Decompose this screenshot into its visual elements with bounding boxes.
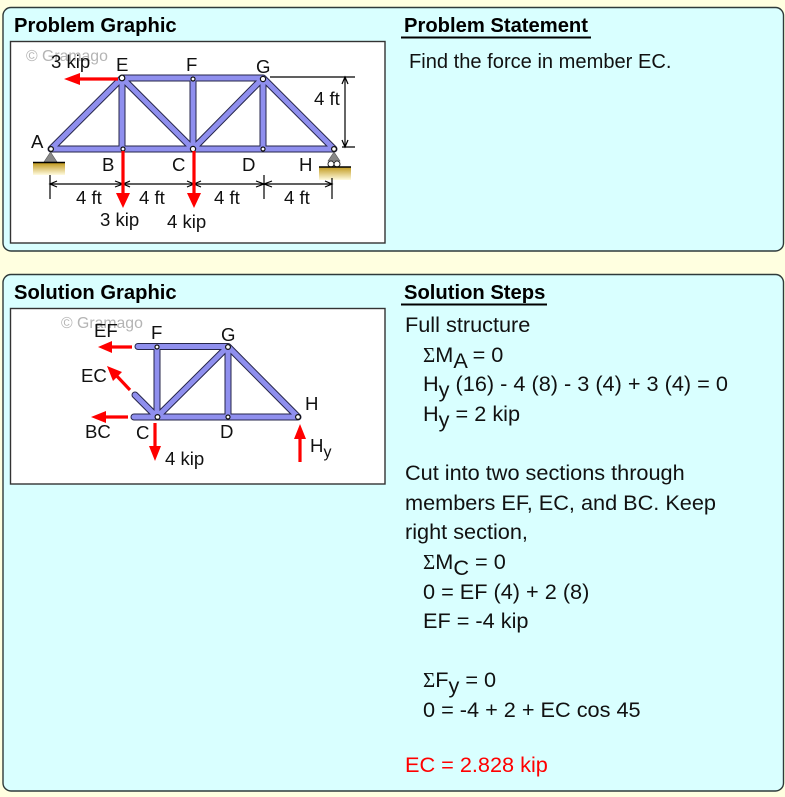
- text: solution steps: H: [423, 401, 439, 426]
- labels: problem graphic: 4 ft: [314, 88, 341, 109]
- labels: problem graphic: H: [299, 154, 312, 175]
- text: solution steps: ΣF: [423, 667, 448, 692]
- text: solution steps: ΣM: [423, 342, 453, 367]
- support: roller at H: [319, 152, 351, 180]
- heading: solution graphic: Solution Graphic: [14, 282, 177, 304]
- labels: solution graphic: y: [323, 444, 331, 461]
- heading: problem statement: Problem Statement: [404, 15, 588, 37]
- arrow: EC: [107, 366, 130, 390]
- text: solution steps: ΣM: [423, 549, 453, 574]
- text: answer: EC = 2.828 kip: [405, 752, 548, 777]
- labels: problem graphic: B: [102, 154, 114, 175]
- labels: solution graphic: H: [305, 393, 318, 414]
- labels: solution graphic: D: [220, 421, 233, 442]
- text: solution steps: (16) - 4 (8) - 3 (4) + 3 (4) = 0: [450, 371, 728, 396]
- text: solution steps: EF = -4 kip: [423, 608, 528, 633]
- text: solution steps: y: [439, 407, 450, 432]
- text: solution steps: Full structure: [405, 312, 530, 337]
- arrow: 3 kip down at B: [116, 151, 130, 208]
- panel: solution graphic box: [10, 308, 385, 484]
- arrow: 3 kip left at E: [64, 73, 118, 85]
- text: solution steps: [405, 312, 728, 777]
- labels: solution graphic: 4 kip: [165, 448, 204, 469]
- arrow: BC: [91, 411, 128, 423]
- text: solution steps: H: [423, 371, 439, 396]
- truss: right section: [134, 345, 300, 419]
- text: solution steps: 0 = -4 + 2 + EC cos 45: [423, 697, 641, 722]
- labels: solution graphic: F: [151, 322, 162, 343]
- labels: problem graphic: 4 ft: [139, 187, 166, 208]
- panel: problem graphic box: [10, 42, 385, 243]
- labels: problem graphic: F: [186, 54, 197, 75]
- panel: solution: [3, 274, 784, 791]
- panel: problem: [3, 8, 784, 251]
- text: solution steps: C: [453, 555, 469, 580]
- text: solution steps: = 2 kip: [450, 401, 520, 426]
- labels: problem graphic: A: [31, 131, 44, 152]
- labels: problem graphic: 4 ft: [284, 187, 311, 208]
- text: problem statement: Find the force in member EC.: [409, 51, 671, 73]
- text: solution steps: = 0: [469, 549, 506, 574]
- support: pin at A: [33, 152, 65, 175]
- dimensions: horizontal spans: [50, 175, 332, 199]
- watermark: © Gramago: [26, 48, 108, 65]
- labels: problem graphic: 3 kip: [51, 51, 90, 72]
- labels: solution graphic: EC: [81, 365, 107, 386]
- labels: problem graphic: 4 ft: [76, 187, 103, 208]
- labels: problem graphic: 4 kip: [167, 211, 206, 232]
- text: solution steps: A: [453, 348, 468, 373]
- arrow: EF: [98, 341, 132, 353]
- labels: solution graphic: G: [221, 324, 235, 345]
- arrow: 4 kip down at C: [149, 423, 161, 461]
- truss: full structure: [49, 75, 336, 152]
- labels: solution graphic: H: [310, 435, 323, 456]
- text: solution steps: right section,: [405, 519, 528, 544]
- text: solution steps: = 0: [459, 667, 496, 692]
- heading: solution steps: Solution Steps: [404, 282, 545, 304]
- labels: solution graphic: BC: [85, 421, 111, 442]
- labels: solution graphic: EF: [94, 320, 118, 341]
- labels: problem graphic: [31, 51, 341, 232]
- text: solution steps: members EF, EC, and BC. Keep: [405, 490, 716, 515]
- labels: problem graphic: C: [172, 154, 185, 175]
- text: solution steps: = 0: [467, 342, 503, 367]
- arrow: 4 kip down at C: [187, 151, 201, 208]
- dimension: vertical height: [270, 77, 355, 147]
- text: solution steps: Cut into two sections through: [405, 460, 685, 485]
- text: solution steps: 0 = EF (4) + 2 (8): [423, 579, 589, 604]
- labels: problem graphic: E: [116, 54, 128, 75]
- text: solution steps: y: [448, 673, 459, 698]
- labels: problem graphic: 3 kip: [100, 209, 139, 230]
- watermark: © Gramago: [61, 315, 143, 332]
- labels: solution graphic: C: [136, 422, 149, 443]
- text: solution steps: y: [439, 377, 450, 402]
- heading: problem graphic: Problem Graphic: [14, 15, 177, 37]
- labels: problem graphic: D: [242, 154, 255, 175]
- labels: problem graphic: G: [256, 56, 270, 77]
- arrow: Hy up at H: [294, 424, 306, 462]
- labels: problem graphic: 4 ft: [214, 187, 241, 208]
- labels: solution graphic: [81, 320, 331, 469]
